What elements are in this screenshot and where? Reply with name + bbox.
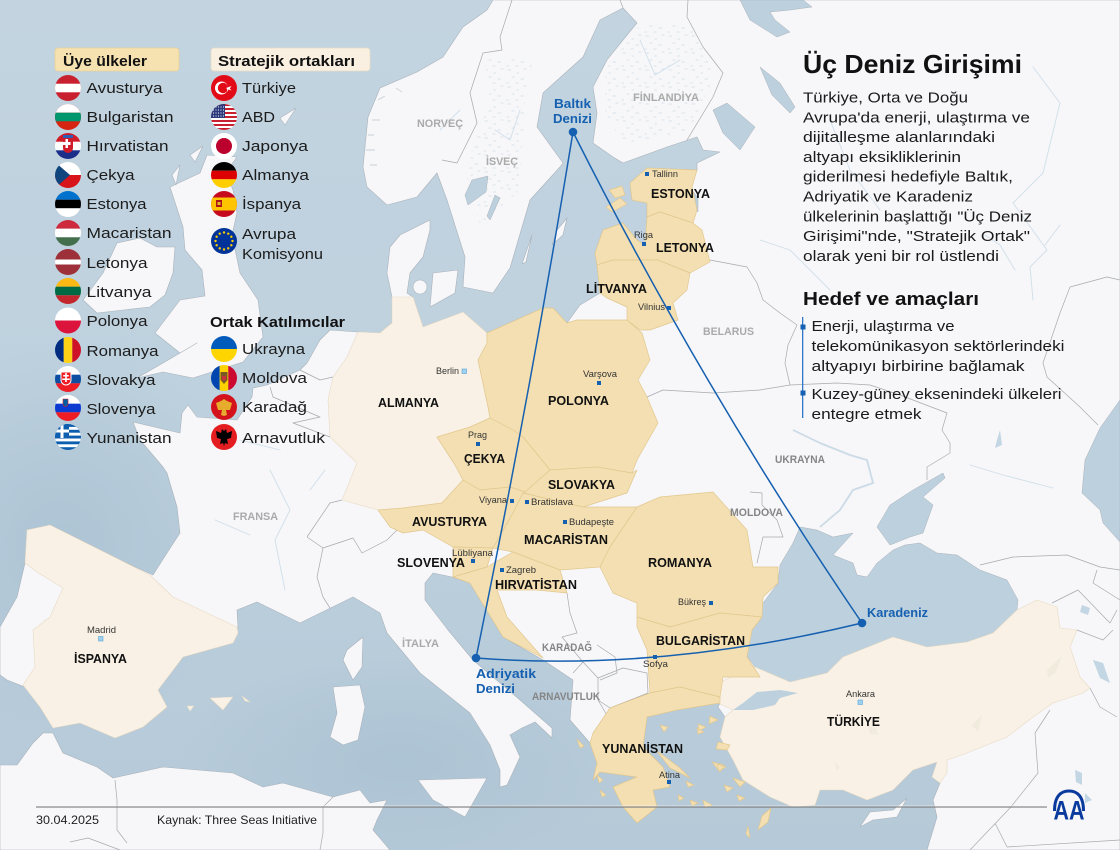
bullet list: goals: altyapıyı birbirine bağlamak — [812, 358, 1025, 375]
legend row: Montenegro: Karadağ — [242, 399, 307, 416]
member and partner country labels: ALMANYA — [378, 396, 439, 410]
member and partner country labels: TÜRKİYE — [827, 714, 880, 729]
panel: member countries legend — [55, 48, 179, 450]
legend row: Lithuania: Litvanya — [86, 284, 152, 301]
legend row: Croatia: Hırvatistan — [86, 138, 168, 155]
legend row: European Commission: Komisyonu — [242, 246, 323, 263]
title: Üç Deniz Girişimi — [803, 49, 1022, 79]
bullet list: goals: entegre etmek — [812, 406, 922, 423]
text block: intro paragraph: dijitalleşme alanlarındaki — [803, 129, 995, 146]
Poland — [478, 308, 658, 473]
member and partner country labels: ÇEKYA — [464, 452, 505, 466]
capital cities: Madrid — [87, 625, 116, 636]
text block: intro paragraph — [803, 90, 1032, 265]
land: North Africa — [0, 733, 390, 850]
footer: source: Kaynak: Three Seas Initiative — [157, 813, 317, 827]
icon: AA logo: AA — [1054, 796, 1084, 826]
legend row: Japan: Japonya — [242, 138, 309, 155]
capital cities: Bükreş — [678, 597, 706, 608]
text block: intro paragraph: giderilmesi hedefiyle Baltık, — [803, 169, 1013, 186]
footer: date: 30.04.2025 — [36, 813, 99, 827]
legend row: Japan — [211, 133, 309, 159]
text block: intro paragraph: Avrupa'da enerji, ulaştırma ve — [803, 109, 1030, 126]
capital cities: Sofya — [643, 659, 669, 670]
Lithuania — [597, 260, 690, 330]
member and partner country labels: BULGARİSTAN — [656, 633, 745, 648]
panel: strategic partners legend — [211, 48, 370, 263]
text block: intro paragraph: Adriyatik ve Karadeniz — [803, 188, 973, 205]
non-member country labels: BELARUS — [703, 326, 754, 338]
capital cities: Lübliyana — [452, 548, 494, 559]
capital cities: Prag — [468, 430, 487, 441]
text block: intro paragraph: Girişimi"nde, "Stratejik Ortak" — [803, 228, 1030, 245]
legend row: Spain — [211, 191, 302, 217]
legend row: Lithuania — [55, 278, 152, 304]
legend row: Ukraine: Ukrayna — [242, 341, 306, 358]
Latvia — [595, 212, 710, 273]
non-member country labels: KARADAĞ — [542, 641, 592, 654]
member and partner country labels: ROMANYA — [648, 556, 712, 570]
bullet list: goals — [800, 317, 1064, 423]
legend row: Latvia: Letonya — [86, 255, 148, 272]
Czechia — [437, 418, 550, 492]
label: Baltic Sea: Baltık — [554, 96, 592, 111]
legend row: Hungary: Macaristan — [86, 225, 172, 242]
Turkey — [718, 600, 1090, 807]
legend row: Türkiye — [211, 75, 296, 101]
legend row: European Commission — [211, 226, 323, 263]
label: Adriatic Sea — [476, 666, 537, 696]
land: Great Britain — [137, 155, 263, 378]
capital cities: Zagreb — [506, 565, 536, 576]
legend row: Romania — [55, 337, 159, 363]
Spain — [23, 525, 238, 738]
member and partner country labels: İSPANYA — [74, 651, 127, 666]
capital cities: Viyana — [479, 495, 508, 506]
member and partner country labels: HIRVATİSTAN — [495, 577, 577, 592]
bullet list: goals: telekomünikasyon sektörlerindeki — [812, 338, 1064, 355]
member countries on the map — [378, 168, 778, 838]
non-member country labels: NORVEÇ — [417, 118, 463, 130]
label: Adriatic Sea: Adriyatik — [476, 666, 537, 681]
Slovakia — [523, 467, 637, 507]
capital cities: Varşova — [583, 369, 618, 380]
heading: associate participants: Ortak Katılımcılar — [210, 314, 345, 331]
non-member country labels: İSVEÇ — [486, 155, 518, 168]
label: Baltic Sea — [553, 96, 592, 126]
capital cities: Ankara — [846, 689, 876, 700]
capital cities: Vilnius — [638, 302, 665, 313]
legend row: Estonia: Estonya — [86, 196, 147, 213]
label: Black Sea: Karadeniz — [867, 605, 928, 620]
capital cities: Budapeşte — [569, 517, 614, 528]
capital cities: Berlin — [436, 366, 459, 377]
legend row: Slovenia — [55, 395, 156, 421]
legend row: Türkiye: Türkiye — [242, 80, 296, 97]
partner countries on the map — [23, 297, 1090, 807]
member and partner country labels: MACARİSTAN — [524, 532, 608, 547]
non-member country labels — [233, 91, 825, 703]
text block: intro paragraph: altyapı eksikliklerinin — [803, 149, 961, 166]
member and partner country labels: POLONYA — [548, 394, 609, 408]
Croatia — [453, 552, 567, 658]
non-member country labels: İTALYA — [402, 637, 439, 650]
member and partner country labels: SLOVENYA — [397, 556, 465, 570]
member and partner country labels — [74, 187, 880, 756]
text block: intro paragraph: olarak yeni bir rol üstlendi — [803, 248, 999, 265]
heading: member countries: Üye ülkeler — [63, 53, 147, 70]
heading: member countries — [55, 48, 179, 71]
legend row: Czechia — [55, 162, 135, 188]
legend row: Greece — [55, 424, 172, 450]
member and partner country labels: LİTVANYA — [586, 281, 647, 296]
Austria — [378, 480, 525, 548]
Romania — [600, 492, 778, 627]
legend row: Poland: Polonya — [86, 313, 148, 330]
seas and large lakes — [465, 0, 1120, 710]
non-member country labels: FİNLANDİYA — [633, 91, 699, 104]
legend row: Latvia — [55, 249, 148, 275]
non-member country labels: FRANSA — [233, 511, 278, 523]
legend row: Bulgaria — [55, 104, 174, 130]
heading: strategic partners: Stratejik ortakları — [218, 53, 355, 70]
member and partner country labels: AVUSTURYA — [412, 515, 487, 529]
legend row: USA: ABD — [242, 109, 275, 126]
Greece — [590, 687, 720, 823]
label: Adriatic Sea: Denizi — [476, 681, 515, 696]
member and partner country labels: LETONYA — [656, 241, 714, 255]
Bulgaria — [637, 613, 762, 697]
capital cities: Tallinn — [652, 169, 678, 180]
legend row: Poland — [55, 308, 148, 334]
heading: strategic partners — [211, 48, 370, 71]
non-member country labels: UKRAYNA — [775, 454, 825, 466]
member and partner country labels: ESTONYA — [651, 187, 710, 201]
legend row: USA — [211, 104, 275, 130]
legend row: Croatia — [55, 133, 168, 159]
member and partner country labels: SLOVAKYA — [548, 478, 615, 492]
panel: associate participants legend — [210, 314, 345, 450]
bullet list: goals: Kuzey-güney eksenindeki ülkeleri — [812, 386, 1062, 403]
legend row: Romania: Romanya — [86, 343, 159, 360]
heading: goals: Hedef ve amaçları — [803, 289, 979, 309]
fjord coast texture — [366, 88, 402, 165]
non-member country labels: MOLDOVA — [730, 507, 783, 519]
legend row: Austria — [55, 75, 163, 101]
footer rule — [36, 806, 1047, 808]
legend row: Estonia — [55, 191, 147, 217]
land: Mediterranean and Baltic islands — [172, 108, 907, 827]
member and partner country labels: YUNANİSTAN — [602, 741, 683, 756]
Estonia — [630, 168, 697, 223]
legend row: Slovenia: Slovenya — [86, 401, 156, 418]
land: Ireland — [83, 238, 175, 313]
non-member country labels: ARNAVUTLUK — [532, 691, 600, 703]
Hungary — [493, 493, 637, 570]
Slovenia — [453, 547, 493, 577]
capital cities: Bratislava — [531, 497, 574, 508]
triangle connecting three seas — [472, 128, 866, 662]
legend row: Greece: Yunanistan — [86, 430, 172, 447]
Germany — [328, 297, 490, 510]
legend row: European Commission: Avrupa — [242, 226, 297, 243]
legend row: Slovakia — [55, 366, 156, 392]
capital cities: Riga — [634, 230, 654, 241]
capital cities — [87, 169, 876, 784]
Greek islands — [577, 716, 771, 838]
bullet list: goals: Enerji, ulaştırma ve — [812, 318, 954, 335]
legend row: Germany: Almanya — [242, 167, 310, 184]
lake speckle texture — [465, 25, 715, 225]
legend row: Bulgaria: Bulgaristan — [86, 109, 174, 126]
legend row: Austria: Avusturya — [86, 80, 163, 97]
text block: intro paragraph: ülkelerinin başlattığı "Üç Deniz — [803, 207, 1032, 225]
legend row: Czechia: Çekya — [86, 167, 135, 184]
legend row: Slovakia: Slovakya — [86, 372, 156, 389]
legend row: Hungary — [55, 220, 172, 246]
legend row: Germany — [211, 162, 310, 188]
legend row: Moldova: Moldova — [242, 370, 308, 387]
capital cities: Atina — [659, 770, 681, 781]
legend row: Spain: İspanya — [242, 195, 302, 213]
text block: intro paragraph: Türkiye, Orta ve Doğu — [803, 90, 968, 107]
legend row: Albania: Arnavutluk — [242, 430, 326, 447]
label: Baltic Sea: Denizi — [553, 111, 592, 126]
